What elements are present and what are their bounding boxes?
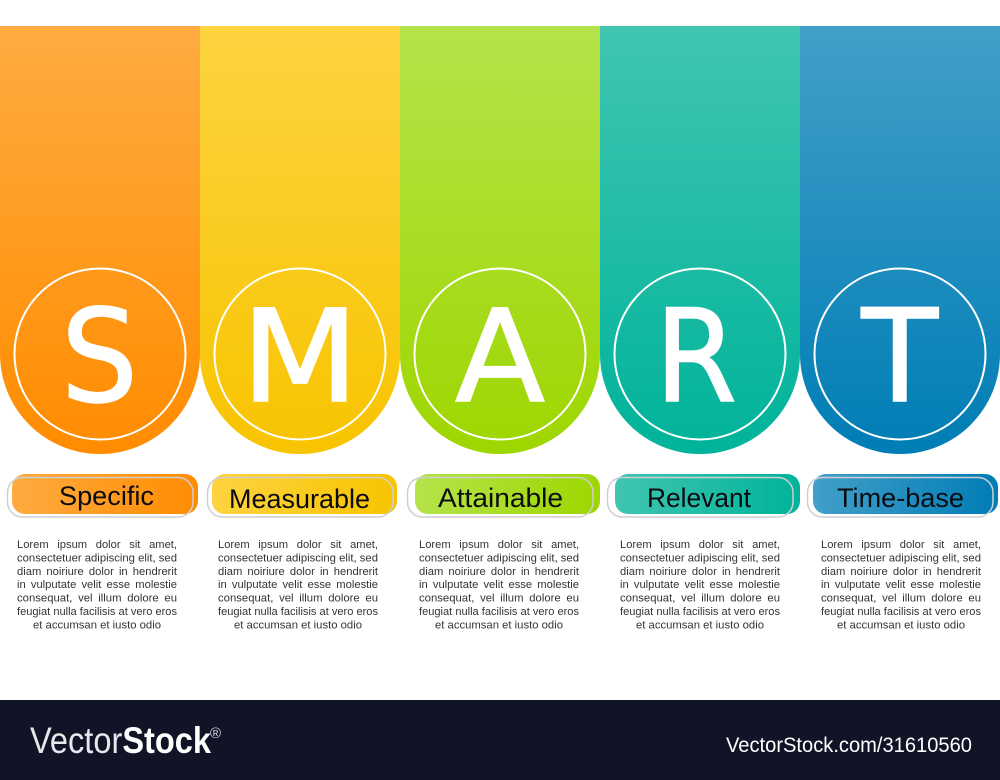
text block: Measurable description: Lorem ipsum dolor sit amet, xyxy=(218,539,378,551)
text block: Relevant description: consequat, vel illum dolore eu xyxy=(620,593,780,605)
panel: T banner: T xyxy=(861,283,939,432)
label: Relevant xyxy=(608,474,800,517)
footer bar: VectorStock: VectorStock.com/31610560 xyxy=(726,734,972,757)
footer bar: VectorStock: VectorStock xyxy=(30,720,211,761)
label: Attainable xyxy=(408,474,600,517)
text block: Specific description: diam noiriure dolor in hendrerit xyxy=(17,566,177,578)
text block: Specific description: in vulputate velit esse molestie xyxy=(17,579,177,591)
panel: R banner xyxy=(600,26,800,454)
text block: Relevant description xyxy=(620,539,781,631)
text block: Attainable description xyxy=(419,539,580,631)
text block: Attainable description: diam noiriure dolor in hendrerit xyxy=(419,566,579,578)
text block: Measurable description: consectetuer adipiscing elit, sed xyxy=(218,552,378,564)
text block: Time-base description: feugiat nulla facilisis at vero eros xyxy=(821,606,982,618)
label: Measurable xyxy=(208,474,397,517)
text block: Specific description: et accumsan et iusto odio xyxy=(33,619,161,631)
text block: Attainable description: consequat, vel illum dolore eu xyxy=(419,593,579,605)
panel: M banner: M xyxy=(241,283,359,432)
text block: Specific description: feugiat nulla facilisis at vero eros xyxy=(17,606,178,618)
text block: Time-base description: in vulputate velit esse molestie xyxy=(821,579,981,591)
text block: Measurable description: feugiat nulla facilisis at vero eros xyxy=(218,606,379,618)
panel: M banner xyxy=(200,26,400,454)
text block: Time-base description xyxy=(821,539,982,631)
text block: Attainable description: Lorem ipsum dolor sit amet, xyxy=(419,539,579,551)
panel: S banner: S xyxy=(61,283,138,432)
text block: Attainable description: feugiat nulla facilisis at vero eros xyxy=(419,606,580,618)
text block: Relevant description: et accumsan et iusto odio xyxy=(636,619,764,631)
text block: Attainable description: consectetuer adipiscing elit, sed xyxy=(419,552,579,564)
text block: Attainable description: in vulputate velit esse molestie xyxy=(419,579,579,591)
text block: Measurable description: et accumsan et iusto odio xyxy=(234,619,362,631)
text block: Time-base description: diam noiriure dolor in hendrerit xyxy=(821,566,981,578)
text block: Measurable description xyxy=(218,539,379,631)
text block: Measurable description: consequat, vel illum dolore eu xyxy=(218,593,378,605)
text block: Specific description: consectetuer adipiscing elit, sed xyxy=(17,552,177,564)
text block: Relevant description: in vulputate velit esse molestie xyxy=(620,579,780,591)
text block: Time-base description: et accumsan et iusto odio xyxy=(837,619,965,631)
text block: Attainable description: et accumsan et iusto odio xyxy=(435,619,563,631)
text block: Time-base description: consequat, vel illum dolore eu xyxy=(821,593,981,605)
footer bar: VectorStock xyxy=(0,700,1000,780)
panel: A banner xyxy=(400,26,600,454)
label: Specific: Specific xyxy=(59,481,154,511)
label: Specific xyxy=(8,474,198,517)
text block: Relevant description: Lorem ipsum dolor sit amet, xyxy=(620,539,780,551)
text block: Specific description: consequat, vel illum dolore eu xyxy=(17,593,177,605)
panel: S banner xyxy=(0,26,200,454)
footer bar: VectorStock: ® xyxy=(210,725,221,742)
text block: Relevant description: feugiat nulla facilisis at vero eros xyxy=(620,606,781,618)
text block: Measurable description: diam noiriure dolor in hendrerit xyxy=(218,566,378,578)
panel: T banner xyxy=(800,26,1000,454)
text block: Time-base description: consectetuer adipiscing elit, sed xyxy=(821,552,981,564)
label: Measurable: Measurable xyxy=(229,484,370,514)
text block: Time-base description: Lorem ipsum dolor sit amet, xyxy=(821,539,981,551)
text block: Relevant description: consectetuer adipiscing elit, sed xyxy=(620,552,780,564)
text block: Relevant description: diam noiriure dolor in hendrerit xyxy=(620,566,780,578)
panel: R banner: R xyxy=(655,283,737,432)
panel: A banner: A xyxy=(455,283,545,432)
text block: Specific description: Lorem ipsum dolor sit amet, xyxy=(17,539,177,551)
text block: Measurable description: in vulputate velit esse molestie xyxy=(218,579,378,591)
label: Relevant: Relevant xyxy=(647,483,751,513)
label: Time-base xyxy=(808,474,998,517)
text block: Specific description xyxy=(17,539,178,631)
label: Attainable: Attainable xyxy=(438,483,563,513)
label: Time-base: Time-base xyxy=(837,483,964,513)
